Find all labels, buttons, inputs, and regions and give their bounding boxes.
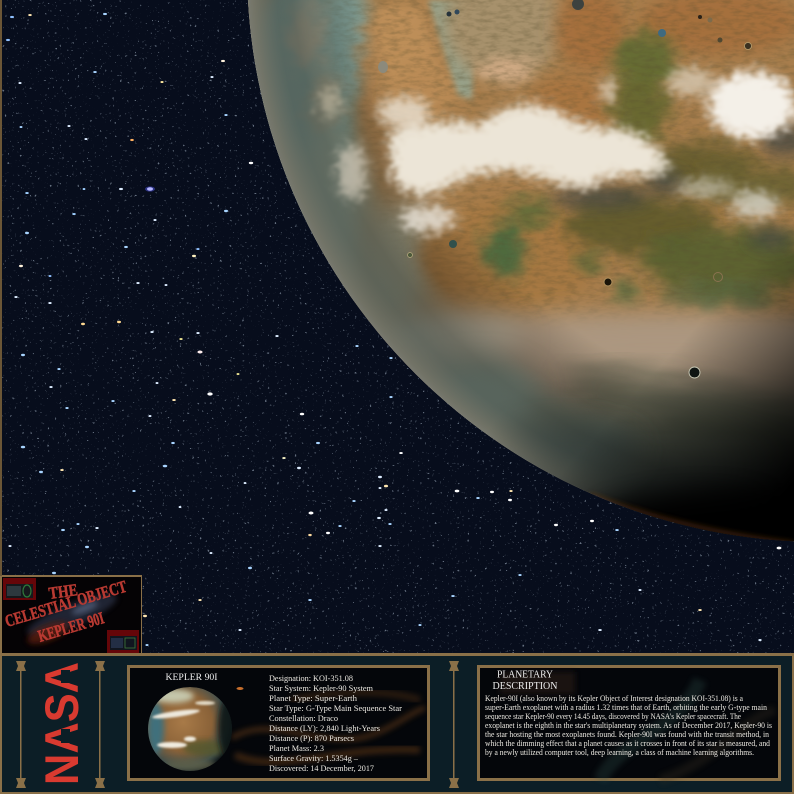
description text: exoplanet is the eighth in the star's multiplanetary system. As of December 2017, Kepler-90 is bbox=[485, 721, 772, 730]
description text: which the dimming effect that a planet causes as it crosses in front of its star is measured, and bbox=[485, 739, 770, 748]
facts list: Planet Mass: 2.3 bbox=[269, 743, 324, 753]
description text: sequence star Kepler-90 every 14.45 days, discovered by NASA's Kepler spacecraft. The bbox=[485, 712, 741, 721]
surface: teal ocean and sand zones bbox=[243, 0, 794, 320]
facts list: Distance (P): 870 Parsecs bbox=[269, 733, 354, 743]
bottom info bar bbox=[0, 653, 794, 794]
clouds bbox=[318, 68, 794, 232]
red title text bbox=[3, 577, 129, 646]
ornamental column: left bbox=[16, 661, 26, 788]
facts list: Discovered: 14 December, 2017 bbox=[269, 763, 374, 773]
lower tan and grey-green cloud bands bbox=[376, 296, 794, 511]
panel: planet facts bbox=[128, 666, 428, 780]
left frame edge bbox=[0, 0, 2, 576]
description heading: DESCRIPTION bbox=[492, 681, 558, 692]
ornamental column: middle bbox=[95, 661, 105, 788]
cloud shadows bbox=[550, 124, 794, 248]
facts list bbox=[269, 673, 402, 773]
small red inset: bottom right bbox=[107, 630, 139, 653]
title badge: The Celestial Object Kepler 90I bbox=[0, 575, 142, 654]
facts list: Star System: Kepler-90 System bbox=[269, 683, 373, 693]
facts list: Constellation: Draco bbox=[269, 713, 338, 723]
small planet bbox=[148, 687, 232, 771]
ornamental column: right bbox=[449, 661, 459, 788]
craters bbox=[378, 0, 752, 378]
terrain texture bbox=[328, 0, 794, 316]
small planet heading: KEPLER 90I bbox=[166, 672, 218, 682]
description text: Kepler-90I (also known by its Kepler Object of Interest designation KOI-351.08) is a bbox=[485, 694, 743, 703]
red title text: CELESTIAL OBJECT bbox=[3, 577, 129, 631]
description text bbox=[485, 694, 772, 757]
NASA logo: NASA bbox=[35, 662, 88, 785]
facts list: Distance (LY): 2,840 Light-Years bbox=[269, 723, 380, 733]
red title text: KEPLER 90I bbox=[36, 608, 107, 646]
description text: the star hosting the most exoplanets found. Kepler-90I was found with the transit method, in bbox=[485, 730, 769, 739]
description text: super-Earth exoplanet with a radius 1.32 times that of Earth, orbiting the early G-type main bbox=[485, 703, 767, 712]
bright stars bbox=[6, 13, 781, 646]
surface: green vegetation bbox=[483, 32, 794, 309]
facts list: Star Type: G-Type Main Sequence Star bbox=[269, 703, 402, 713]
description heading bbox=[492, 670, 558, 692]
limb atmosphere glow bbox=[248, 0, 610, 497]
description heading: PLANETARY bbox=[497, 670, 553, 680]
nebula texture bbox=[500, 672, 775, 780]
description text: by a newly utilized computer tool, deep learning, a class of machine learning algorithms. bbox=[485, 748, 754, 757]
panel: planetary description bbox=[478, 666, 780, 780]
facts list: Surface Gravity: 1.5354g – bbox=[269, 753, 359, 763]
planet: Kepler 90i close-up bbox=[240, 0, 794, 568]
orange nebula streaks bbox=[232, 692, 425, 762]
red title text: THE bbox=[48, 580, 79, 603]
facts list: Planet Type: Super-Earth bbox=[269, 693, 358, 703]
night side shadow bbox=[240, 0, 794, 568]
facts list: Designation: KOI-351.08 bbox=[269, 673, 353, 683]
small red inset: top left bbox=[3, 578, 36, 600]
galaxy image bbox=[23, 587, 121, 649]
